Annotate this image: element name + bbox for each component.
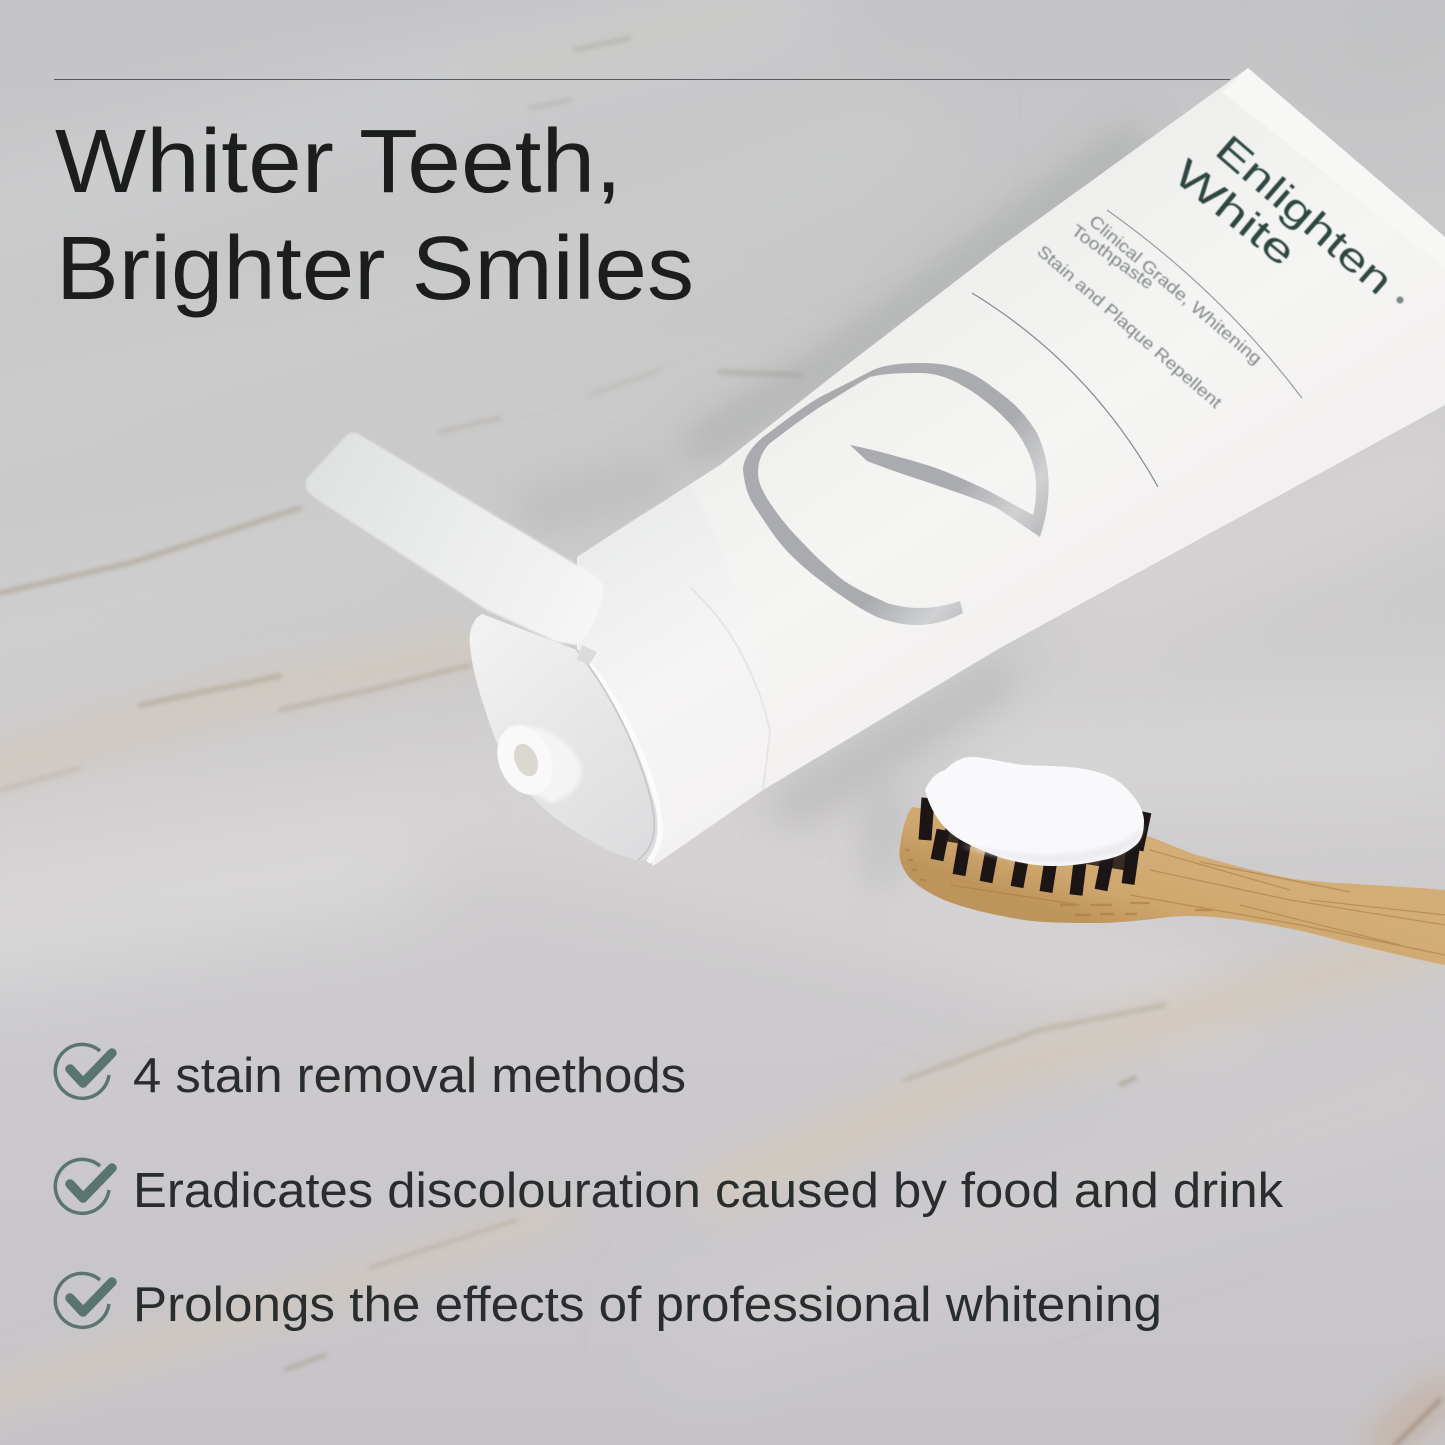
toothpaste tube: [306, 68, 1445, 866]
benefit: discolouration: Eradicates discolouration caused by food and drink: [133, 1164, 1284, 1218]
tube logo: [743, 363, 1049, 625]
crimp seal: [1222, 68, 1445, 268]
title: [55, 112, 694, 319]
paste shading: [960, 825, 1143, 862]
tube body: [577, 68, 1445, 790]
cap seam: [690, 587, 770, 790]
icon: check: [55, 1159, 112, 1213]
nozzle: [487, 717, 581, 803]
bristles: [925, 798, 1145, 895]
icon: check: [55, 1044, 112, 1098]
tube label lines: [972, 210, 1302, 487]
product description on tube: Stain and Plaque Repellent: [1033, 242, 1226, 412]
icon: check: [55, 1273, 112, 1327]
tube cap: [577, 485, 770, 866]
handle and head: [899, 807, 1445, 965]
brand name on tube: [1165, 127, 1404, 304]
product description on tube: [1033, 212, 1265, 412]
cap rim: [577, 650, 660, 862]
toothpaste on bristles: [925, 757, 1144, 866]
product description on tube: Toothpaste: [1068, 221, 1157, 293]
title: Brighter Smiles: [56, 219, 694, 319]
title: Whiter Teeth,: [55, 112, 622, 212]
wood grain: [905, 850, 1445, 955]
brand name on tube: Enlighten: [1207, 127, 1401, 303]
top divider rule: [54, 79, 1230, 80]
cap end face: [470, 614, 657, 860]
benefit: stain removal: 4 stain removal methods: [133, 1049, 686, 1103]
product description on tube: Clinical Grade, Whitening: [1085, 212, 1265, 368]
flip lid: [306, 432, 604, 645]
toothbrush: [899, 757, 1445, 965]
benefit: prolongs whitening: Prolongs the effects of professional whitening: [133, 1278, 1162, 1332]
tube shadow: [540, 145, 1130, 880]
brand name on tube: White: [1165, 152, 1304, 275]
